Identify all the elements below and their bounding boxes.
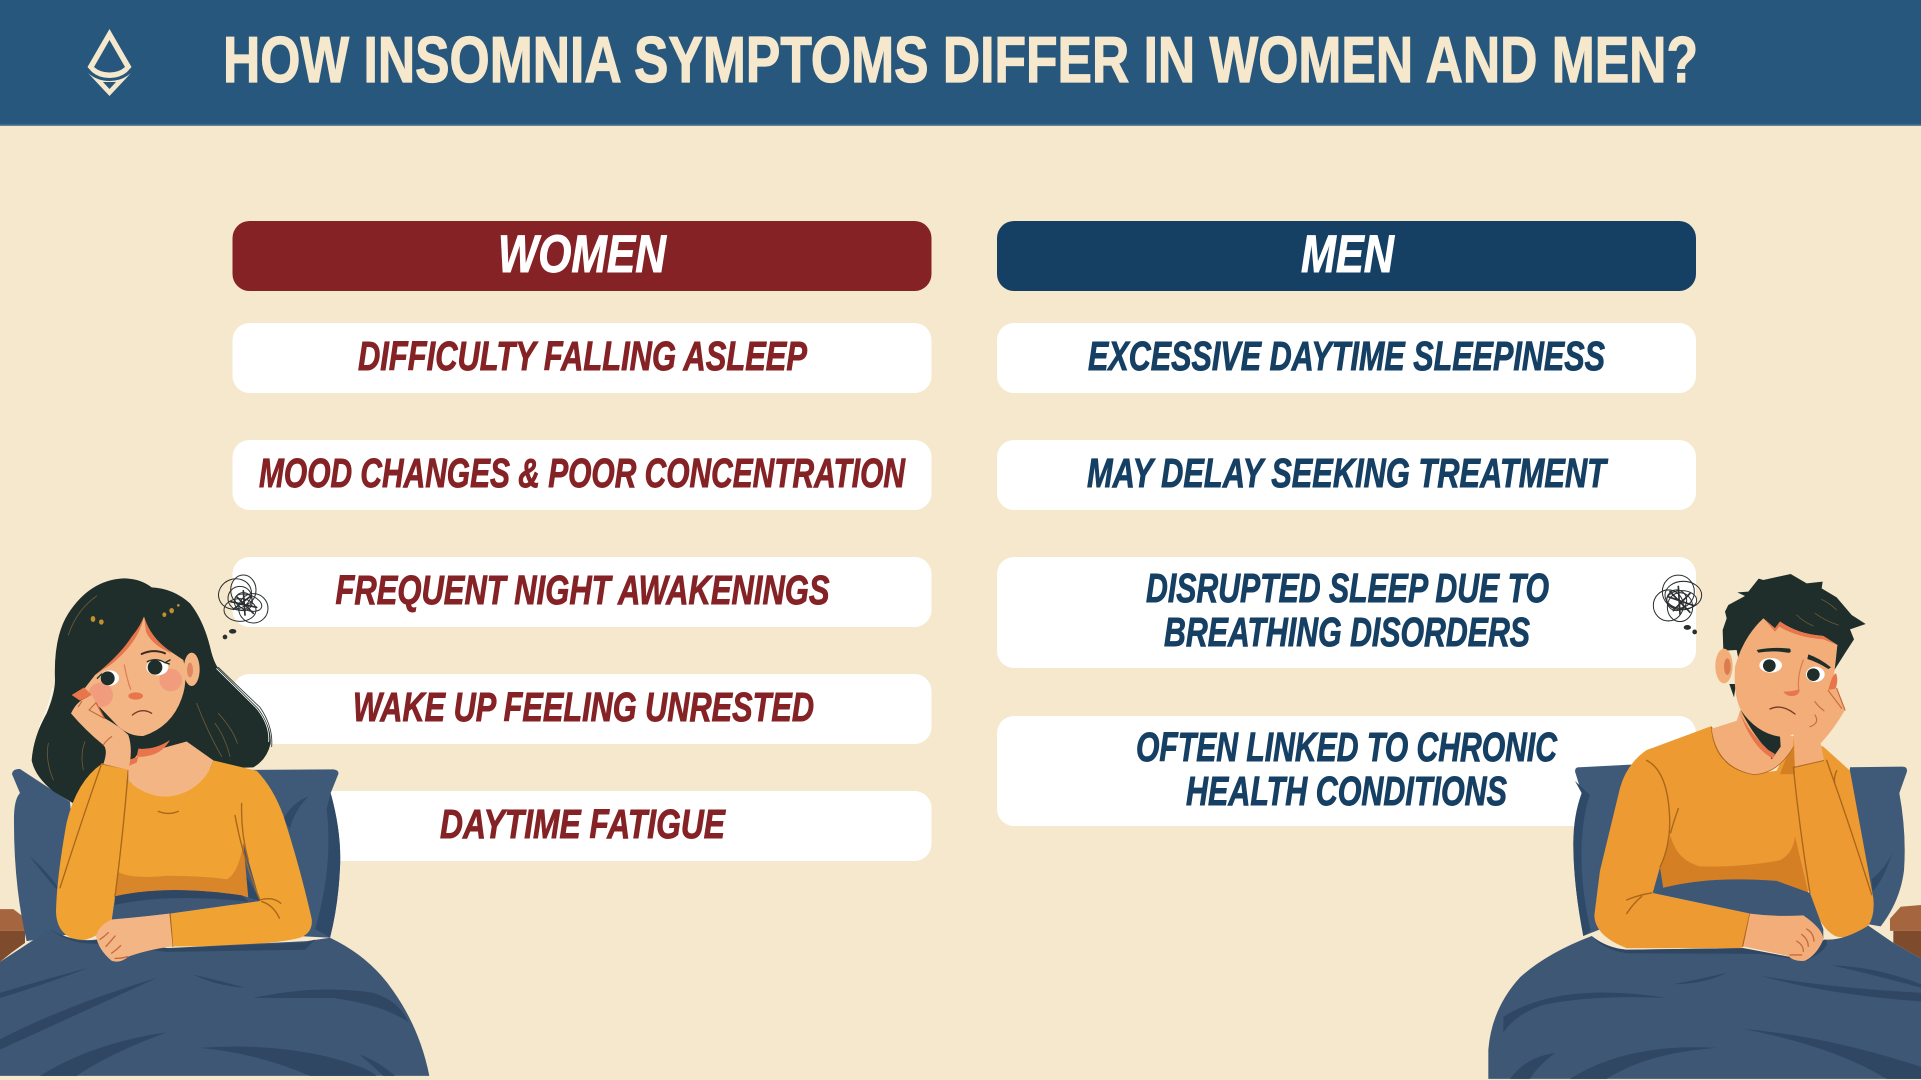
head xyxy=(1715,574,1866,767)
symptom: mood changes: MOOD CHANGES & POOR CONCENTRATION xyxy=(259,450,906,496)
eyes xyxy=(97,651,170,686)
icon: logo diamond xyxy=(88,29,132,96)
panel: women symptoms xyxy=(232,221,932,861)
hand on blanket xyxy=(1743,914,1823,961)
symptom: disrupted sleep: BREATHING DISORDERS xyxy=(1164,609,1530,655)
ear xyxy=(1715,649,1733,683)
neck and chest xyxy=(1712,702,1793,774)
pillow and nightstand xyxy=(0,769,340,962)
shirt xyxy=(56,760,312,946)
shirt xyxy=(1594,726,1874,948)
blanket xyxy=(1488,879,1921,1079)
symptom: difficulty falling asleep xyxy=(232,323,932,393)
symptom: may delay seeking treatment xyxy=(997,440,1696,510)
symptom: difficulty falling asleep: DIFFICULTY FALLING ASLEEP xyxy=(358,333,807,379)
body, shirt and blanket xyxy=(0,741,429,1076)
men heading: MEN xyxy=(1301,225,1395,284)
women heading: WOMEN xyxy=(498,225,667,284)
symptom: disrupted sleep: DISRUPTED SLEEP DUE TO xyxy=(1146,565,1549,611)
blanket xyxy=(0,890,429,1076)
eyes xyxy=(1757,648,1831,682)
thought scribble xyxy=(214,574,268,639)
pillow xyxy=(1573,765,1907,936)
symptom: disrupted sleep xyxy=(997,557,1696,668)
header band xyxy=(0,0,1921,126)
body, pillow and blanket xyxy=(1488,702,1921,1079)
symptom: chronic health conditions: OFTEN LINKED TO CHRONIC xyxy=(1136,724,1558,770)
head xyxy=(71,574,268,770)
symptom: frequent night awakenings xyxy=(232,557,932,627)
women heading xyxy=(232,221,932,291)
symptom: mood changes xyxy=(232,440,932,510)
symptom: daytime fatigue: DAYTIME FATIGUE xyxy=(440,801,726,847)
face xyxy=(83,617,185,736)
nose and mouth xyxy=(1770,660,1803,714)
nightstand xyxy=(1890,905,1921,958)
symptom: excessive daytime sleepiness: EXCESSIVE DAYTIME SLEEPINESS xyxy=(1088,333,1605,379)
symptom: chronic health conditions: HEALTH CONDITIONS xyxy=(1186,768,1507,814)
thought scribble xyxy=(1653,575,1702,634)
men heading xyxy=(997,221,1696,291)
panel: men symptoms xyxy=(997,221,1696,826)
symptom: daytime fatigue xyxy=(232,791,932,861)
hair back xyxy=(32,578,272,803)
hair xyxy=(1723,574,1866,697)
symptom: wake up feeling unrested: WAKE UP FEELING UNRESTED xyxy=(353,684,814,730)
hand on blanket xyxy=(96,914,173,962)
illustration: tired woman in bed xyxy=(0,574,429,1076)
symptom: excessive daytime sleepiness xyxy=(997,323,1696,393)
symptom: wake up feeling unrested xyxy=(232,674,932,744)
symptom: frequent night awakenings: FREQUENT NIGHT AWAKENINGS xyxy=(336,567,830,613)
face xyxy=(1735,618,1837,759)
symptom: chronic health conditions xyxy=(997,716,1696,826)
hand on cheek xyxy=(71,687,131,770)
hand on cheek xyxy=(1793,673,1845,767)
chest and neck xyxy=(128,741,213,796)
nose and mouth xyxy=(124,665,152,715)
ear xyxy=(184,653,200,686)
symptom: may delay seeking treatment: MAY DELAY SEEKING TREATMENT xyxy=(1087,450,1608,496)
neck shadow xyxy=(128,725,175,766)
illustration: tired man in bed xyxy=(1488,574,1921,1079)
